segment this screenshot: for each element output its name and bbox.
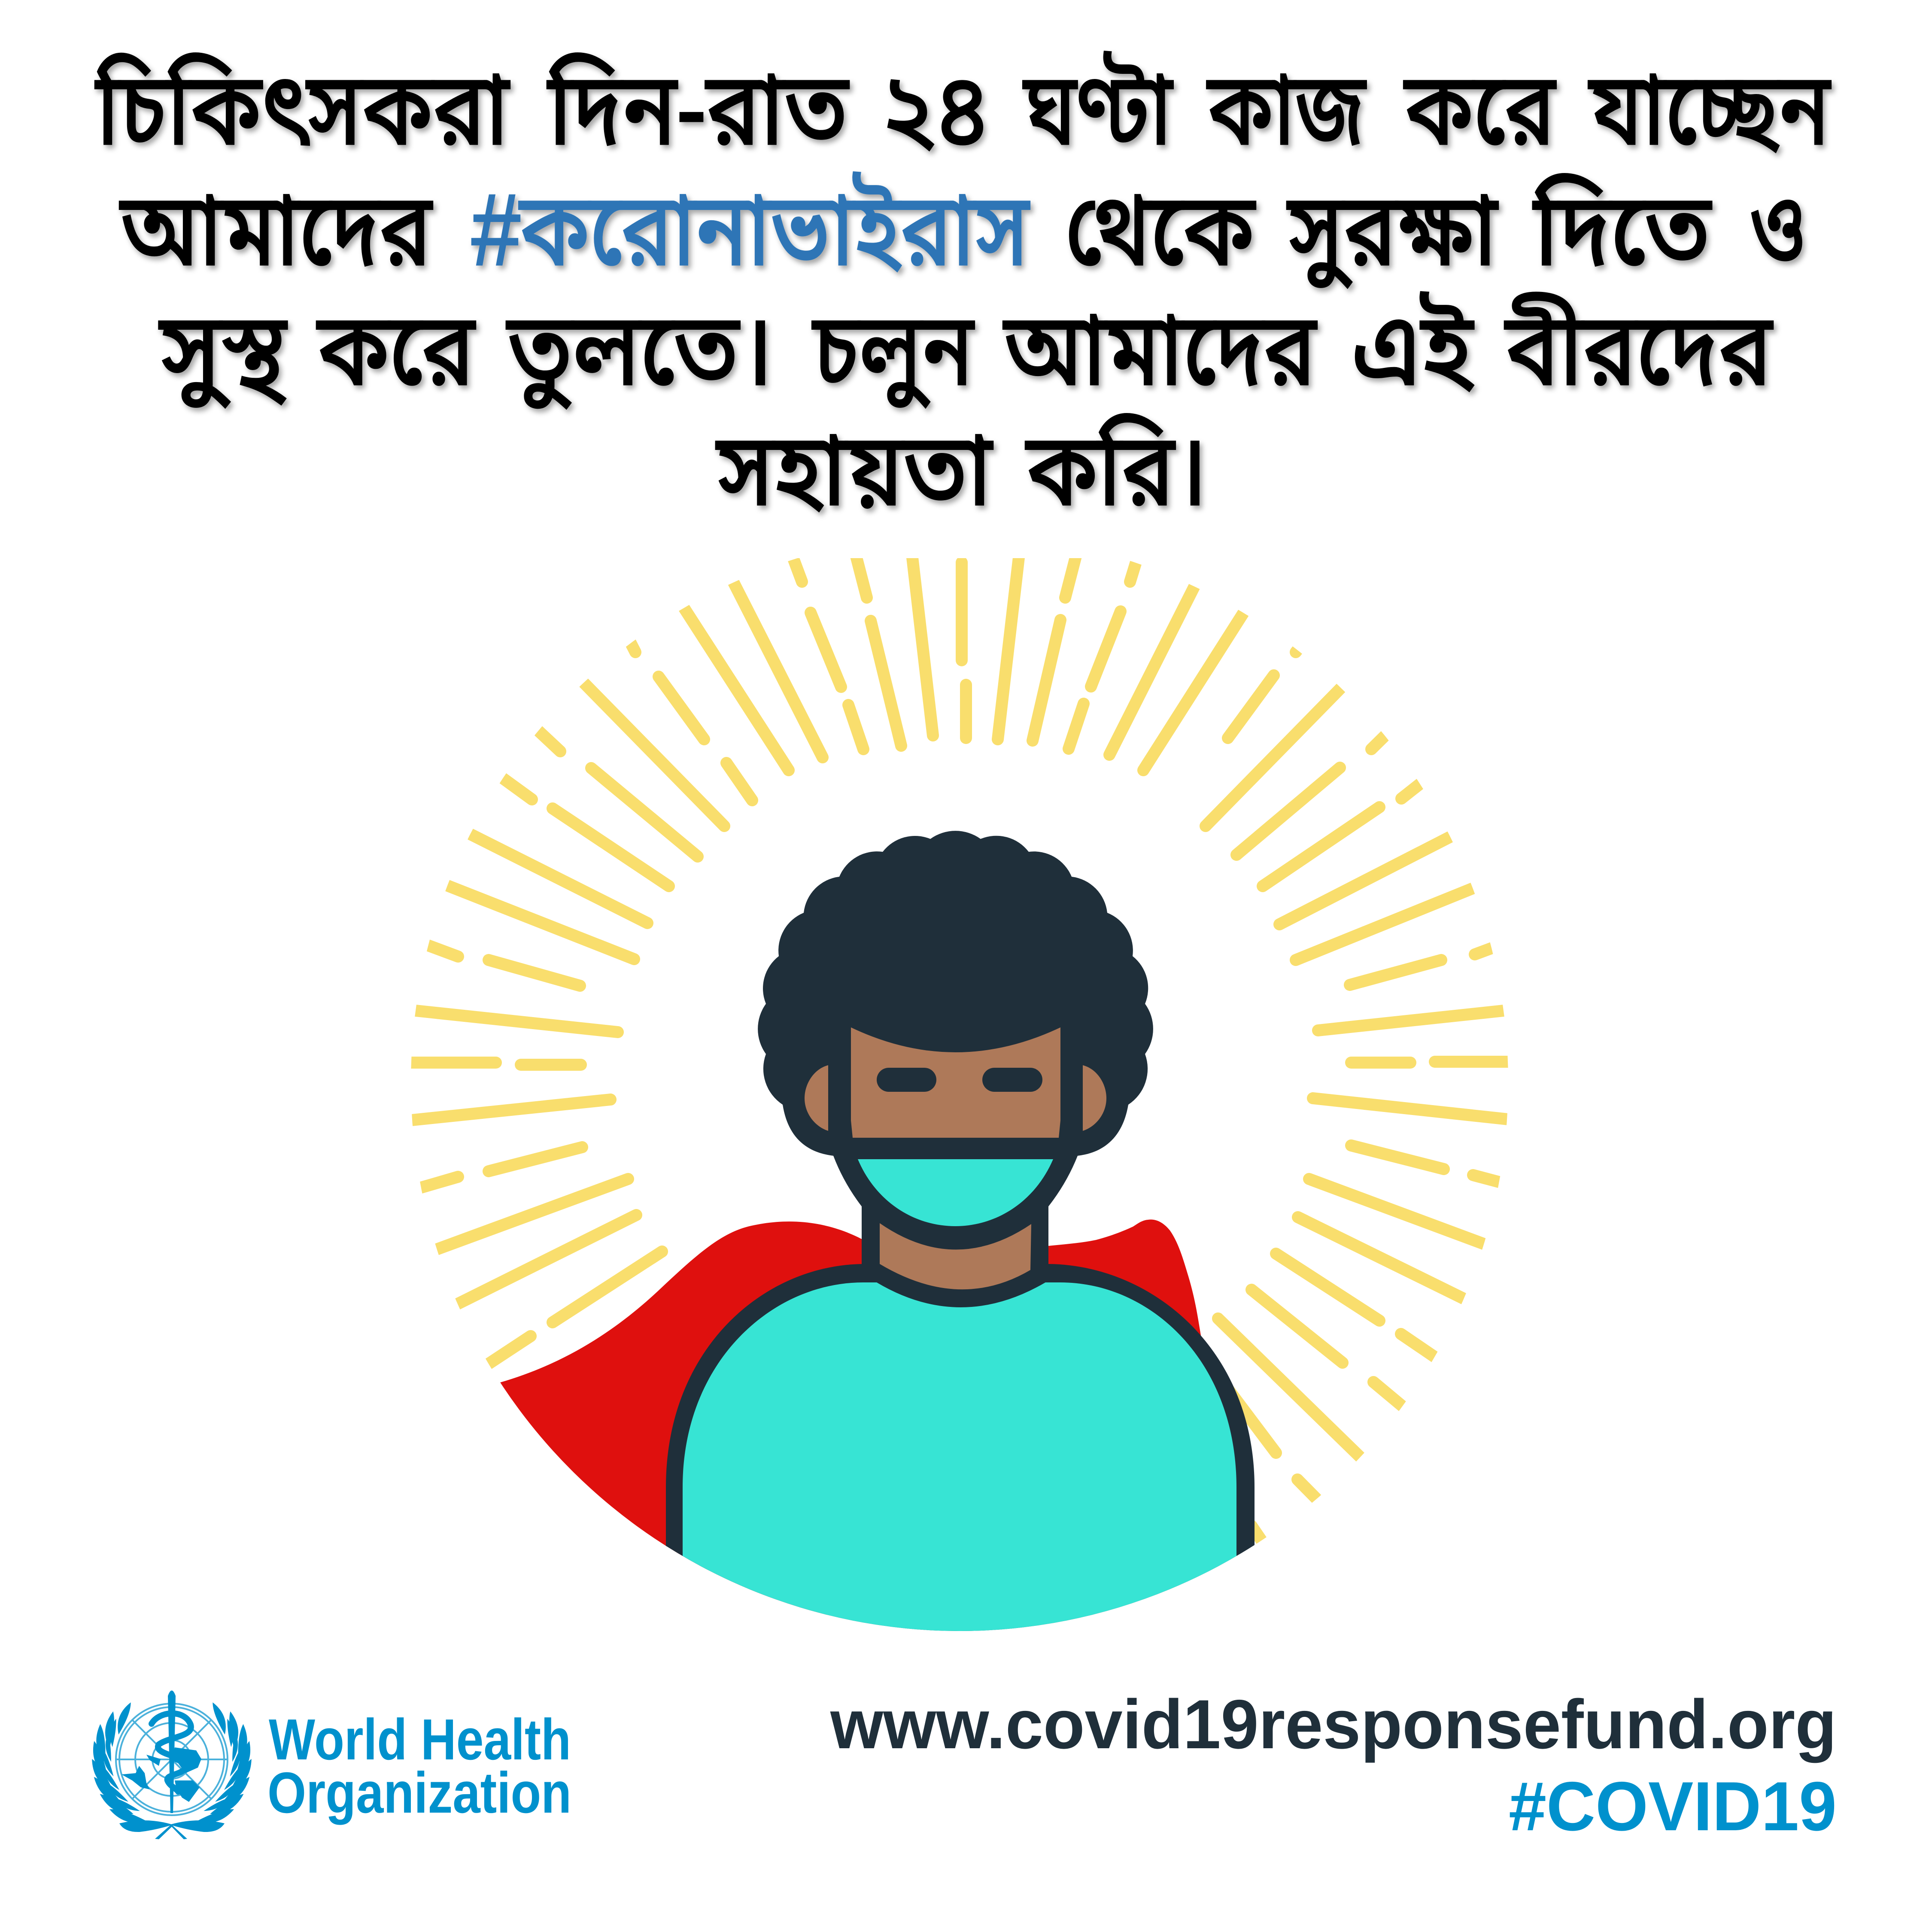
headline line 3: সুস্থ [159,293,287,407]
headline line 2 [119,173,1805,288]
sun rays [399,550,1520,1554]
ribbons [119,1820,225,1839]
World Health: World Health [269,1707,571,1772]
shirt outline [666,1264,1255,1631]
superhero health worker [500,831,1255,1674]
left ear [805,1065,828,1131]
snake [152,1713,191,1792]
rod [168,1691,176,1813]
headline line 3: আমাদের [1003,293,1317,406]
Organization: Organization [267,1760,571,1825]
right ear [1083,1065,1106,1131]
globe grid [116,1704,228,1815]
headline line 2: ও [1750,173,1805,286]
headline line 1 [95,52,1831,165]
headline line 2: থেকে [1065,173,1255,286]
right eye [982,1068,1042,1092]
headline line 3: করে [316,293,476,406]
headline line 3: তুলতে। [506,293,774,408]
headline line 1: করে [1403,52,1556,165]
headline line 1: ২৪ [880,52,990,165]
headline line 3: এই [1352,293,1473,406]
headline line 2: আমাদের [119,173,433,286]
headline line 2: সুরক্ষা [1287,173,1498,288]
headline line 1: যাচ্ছেন [1588,52,1831,165]
hair and head outline [758,831,1153,1284]
shirt [683,1282,1236,1631]
WHO emblem [91,1691,252,1839]
headline line 3: বীরদের [1504,293,1773,406]
left laurel [91,1702,147,1832]
headline line 1: কাজ [1207,52,1366,165]
hashtag: #COVID19 [1509,1768,1837,1845]
headline line 1: চিকিৎসকরা [95,52,510,165]
face mask [858,1159,1053,1226]
headline line 4 [716,413,1208,526]
headline line 4: করি। [1025,413,1208,526]
continents [122,1747,201,1802]
neck [880,1223,1031,1289]
red cape [500,1219,1201,1615]
face [851,1027,1060,1138]
right laurel [197,1702,252,1832]
left eye [877,1068,936,1092]
headline line 3 [159,293,1773,408]
headline line 2: দিতে [1533,173,1712,286]
WHO wordmark [267,1707,571,1825]
headline [95,52,1831,526]
headline line 1: ঘণ্টা [1023,52,1173,165]
headline line 2: #করোনাভাইরাস [472,173,1030,286]
WHO logo [91,1691,571,1839]
website url: www.covid19responsefund.org [830,1686,1837,1763]
headline line 4: সহায়তা [716,413,993,526]
headline line 3: চলুন [812,293,974,407]
headline line 1: দিন-রাত [547,52,849,165]
